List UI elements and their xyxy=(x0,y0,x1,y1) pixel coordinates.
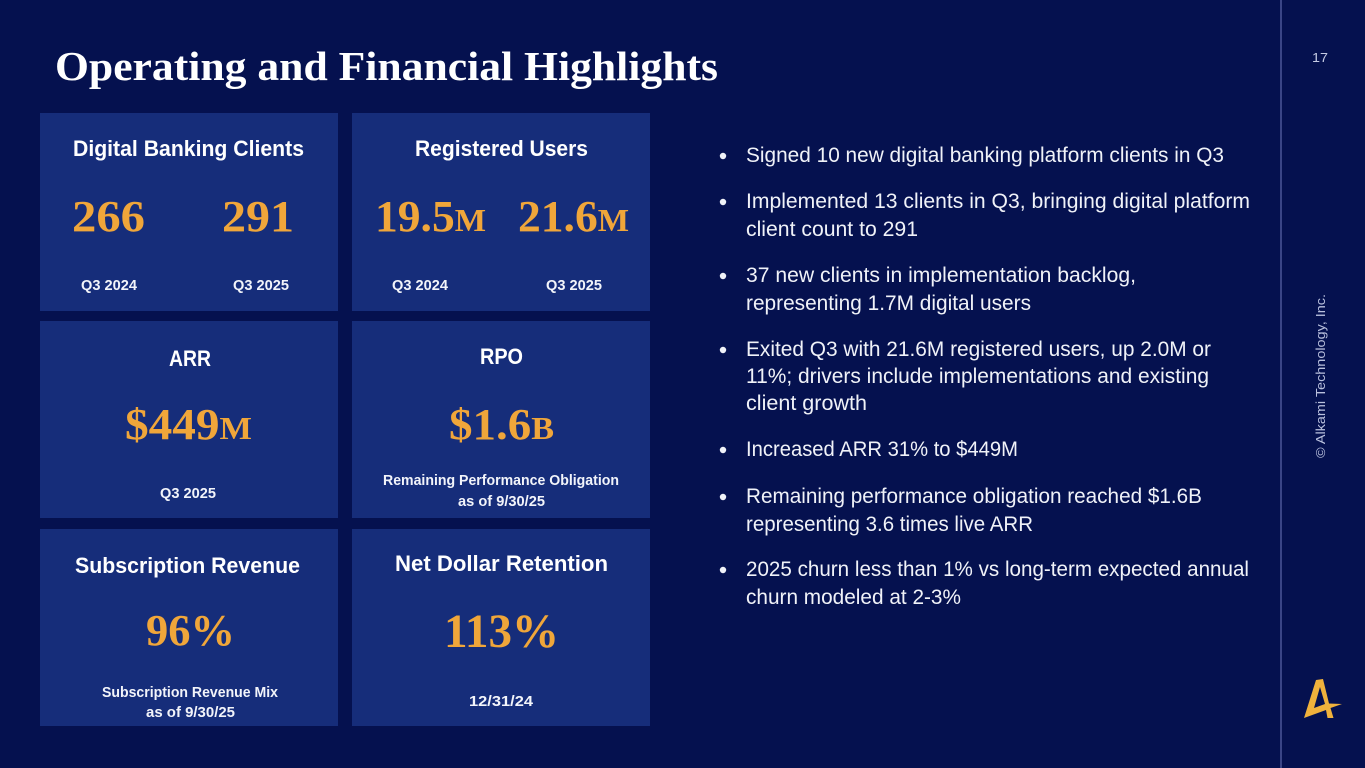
label: Q3 2025: Q3 2025 xyxy=(546,278,602,294)
label: remaining performance obligation xyxy=(383,473,619,510)
value: 266: 266 xyxy=(72,192,145,241)
value: 113%: 113% xyxy=(444,605,559,658)
icon: Alkami logo xyxy=(1304,679,1342,718)
heading: registered users: Registered Users xyxy=(415,136,588,161)
label: subscription revenue mix xyxy=(102,685,278,721)
value: 19.5M: 19.5M xyxy=(375,192,486,241)
bullet: backlog: representing 1.7M digital users xyxy=(746,292,1031,315)
bullet: backlog: 37 new clients in implementation backlog, xyxy=(746,264,1136,287)
panel: ARR xyxy=(40,321,338,518)
heading: RPO: RPO xyxy=(480,344,523,369)
bullet: backlog xyxy=(720,264,1136,315)
value: $449M: $449M xyxy=(125,400,252,449)
heading: ARR: ARR xyxy=(169,346,211,371)
panel: digital banking clients xyxy=(40,113,338,311)
label: Q3 2024: Q3 2024 xyxy=(392,278,448,294)
bullet: registered users: 11%; drivers include implementations and existing xyxy=(746,365,1209,388)
label: subscription revenue mix: as of 9/30/25 xyxy=(146,705,235,721)
label: Q3 2024: Q3 2024 xyxy=(81,278,137,294)
bullet: implementations xyxy=(720,190,1250,241)
label: 12/31/24: 12/31/24 xyxy=(469,694,533,710)
bullet: ARR: Increased ARR 31% to $449M xyxy=(746,438,1018,461)
bullet: registered users: client growth xyxy=(746,392,867,415)
label: remaining performance obligation: Remaining Performance Obligation xyxy=(383,473,619,489)
label: Q3 2025: Q3 2025 xyxy=(233,278,289,294)
bullet: churn: churn modeled at 2-3% xyxy=(746,586,961,609)
label: remaining performance obligation: as of 9/30/25 xyxy=(458,494,545,510)
panel: net dollar retention xyxy=(352,529,650,726)
panel: RPO xyxy=(352,321,650,518)
label: subscription revenue mix: Subscription Revenue Mix xyxy=(102,685,278,701)
value: 96%: 96% xyxy=(146,606,235,655)
bullet: churn: 2025 churn less than 1% vs long-term expected annual xyxy=(746,558,1249,581)
bullet: RPO: representing 3.6 times live ARR xyxy=(746,513,1033,536)
heading: digital banking clients: Digital Banking Clients xyxy=(73,136,304,161)
bullet: RPO xyxy=(720,485,1202,536)
bullet: implementations: client count to 291 xyxy=(746,218,918,241)
panel: registered users xyxy=(352,113,650,311)
heading: subscription revenue: Subscription Revenue xyxy=(75,553,300,578)
bullet: RPO: Remaining performance obligation reached $1.6B xyxy=(746,485,1202,508)
copyright: © Alkami Technology, Inc. xyxy=(1313,294,1328,458)
bullet: implementations: Implemented 13 clients in Q3, bringing digital platform xyxy=(746,190,1250,213)
page number: 17 xyxy=(1312,50,1328,65)
bullet: churn xyxy=(720,558,1249,609)
value: $1.6B: $1.6B xyxy=(449,400,554,449)
panel: subscription revenue xyxy=(40,529,338,726)
bullet: registered users xyxy=(720,338,1211,415)
heading: net dollar retention: Net Dollar Retention xyxy=(395,551,608,576)
title: Operating and Financial Highlights xyxy=(55,43,718,89)
value: 291: 291 xyxy=(222,192,294,241)
bullet: new clients: Signed 10 new digital banking platform clients in Q3 xyxy=(746,144,1224,167)
value: 21.6M: 21.6M xyxy=(518,192,629,241)
bullet list xyxy=(720,144,1250,609)
bullet: registered users: Exited Q3 with 21.6M registered users, up 2.0M or xyxy=(746,338,1211,361)
label: Q3 2025: Q3 2025 xyxy=(160,486,216,502)
